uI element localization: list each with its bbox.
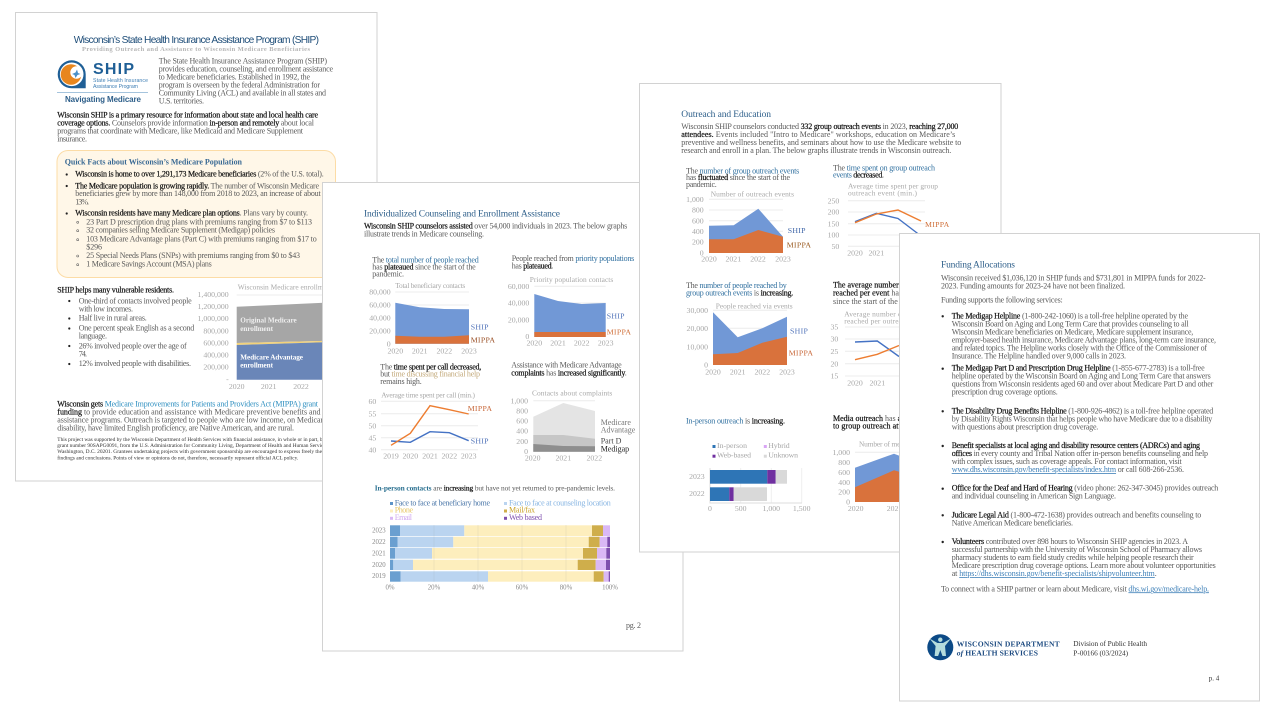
chart: Wisconsin Medicare enrollment: 2020	[229, 382, 245, 391]
text block: disclaimer: Washington, D.C. 20201. Grantees undertaking projects with government sponsorship are encouraged to express freely their	[57, 448, 326, 455]
chart: average time per call: 55	[369, 409, 376, 418]
text block: division	[1073, 639, 1147, 658]
legend: contact types: Face to face at beneficiary home	[395, 498, 490, 507]
chart: in-person outreach bars: Unknown	[768, 451, 798, 460]
chart: average time per call: The time spent per call decreased,	[380, 362, 481, 371]
chart: people reached via events: 2021	[730, 367, 746, 376]
list: disability helpline: with questions about prescription drug coverage.	[952, 422, 1098, 431]
chart: people reached via events: 2020	[705, 367, 721, 376]
chart: priority population contacts	[508, 254, 634, 348]
chart: contacts stacked bar: 20%	[428, 584, 441, 591]
chart: people reached via events	[686, 281, 813, 376]
text block: disclaimer: grant number 90SAPG0091, from the U.S. Administration for Community Living, Department of Health and Human Services,	[57, 442, 330, 449]
text block: connect: To connect with a SHIP partner or learn about Medicare, visit dhs.wi.gov/medicare-help.	[941, 584, 1209, 593]
chart: average time per call: 2023	[461, 452, 477, 461]
chart: time spent on group outreach	[828, 164, 950, 257]
text block: vulnerable residents: 74.	[79, 349, 87, 358]
chart: people reached via events: 10,000	[687, 342, 708, 351]
chart: average time per call: 2020	[403, 452, 418, 461]
chart: time spent on group outreach: 100	[828, 231, 839, 240]
list: Medigap helpline: Wisconsin Board on Aging and Long Term Care that provides counseling to all	[952, 319, 1189, 328]
chart: number of outreach events: 1,000	[686, 195, 704, 204]
chart: priority population contacts: 20,000	[508, 315, 529, 324]
panel: page 1 overview	[16, 12, 377, 481]
text block: outreach intro: research and enroll in a plan. The below graphs illustrate trends in Wisconsin outreach.	[681, 146, 951, 155]
chart: contacts stacked bar: 60%	[516, 584, 529, 591]
chart: number of outreach events: pandemic.	[686, 180, 717, 189]
icon: SHIP logo	[57, 60, 148, 104]
list: Judicare: Judicare Legal Aid (1-800-472-1638) provides outreach and benefits counseling to	[952, 510, 1201, 519]
page number: pg. 2	[626, 621, 641, 630]
list: quick facts: 13%.	[75, 197, 89, 206]
chart: contacts about complaints: 200	[516, 437, 528, 446]
list: disability helpline: The Disability Drug Benefits Helpline (1-800-926-4862) is a toll-free helpline operated	[952, 406, 1213, 415]
chart: number of outreach events: Number of outreach events	[711, 190, 794, 199]
chart: contacts about complaints: 0	[524, 447, 528, 456]
list: quick facts: 23 Part D prescription drug plans with premiums ranging from $7 to $113	[86, 217, 312, 226]
text block: vulnerable residents: 26% involved people over the age of	[79, 341, 187, 350]
chart: average time per call: but time discussing financial help	[380, 370, 480, 379]
list: Medigap helpline: Insurance. The Helpline handled over 9,000 calls in 2023.	[952, 351, 1126, 360]
chart: average number reached per event: 35	[831, 323, 838, 332]
text block: funding intro	[941, 274, 1206, 305]
text block: MIPPA: assistance programs. Outreach is targeted to people who are low income, on Medicare due to a	[57, 416, 354, 425]
chart: media outreach	[832, 414, 923, 513]
heading: counseling: Individualized Counseling and Enrollment Assistance	[364, 210, 560, 220]
chart: average time per call: 50	[369, 421, 376, 430]
list: Judicare: Native American Medicare beneficiaries.	[952, 518, 1073, 527]
chart: average number reached per event: 25	[831, 347, 838, 356]
chart: contacts about complaints: 2020	[525, 453, 541, 462]
heading: quick facts: Quick Facts about Wisconsin’s Medicare Population	[65, 157, 243, 166]
chart: total beneficiary contacts: has plateaued since the start of the	[372, 263, 476, 272]
legend: contact types	[390, 498, 611, 522]
text block: counseling intro	[364, 221, 627, 239]
chart: priority population contacts: MIPPA	[607, 328, 631, 337]
chart: time spent on group outreach: 2020	[847, 248, 863, 257]
text block: primary resource: coverage options. Counselors provide information in-person and remotely about local	[57, 119, 315, 128]
chart: in-person outreach bars: Hybrid	[768, 441, 790, 450]
chart: priority population contacts: has plateaued.	[512, 261, 553, 270]
icon: SHIP logo: Navigating Medicare	[65, 95, 142, 104]
legend: contact types: Web based	[509, 513, 542, 522]
chart: average number reached per event: 2020	[847, 378, 863, 387]
chart: average time per call: 40	[369, 445, 376, 454]
text block: outreach intro	[681, 122, 961, 155]
chart: Wisconsin Medicare enrollment: 800,000	[203, 326, 229, 335]
chart: number of outreach events: 2020	[701, 255, 717, 264]
chart: Wisconsin Medicare enrollment: Wisconsin Medicare enrollment	[238, 282, 334, 291]
chart: time spent on group outreach: 200	[828, 208, 839, 217]
chart: priority population contacts: 60,000	[508, 282, 529, 291]
list: Judicare	[942, 510, 1201, 527]
chart: media outreach: 2021	[887, 504, 902, 513]
chart: average time per call: 45	[369, 433, 376, 442]
chart: time spent on group outreach: MIPPA	[925, 220, 950, 229]
chart: contacts stacked bar: 40%	[472, 584, 485, 591]
chart: total beneficiary contacts: 20,000	[369, 327, 391, 336]
list: Medigap helpline: and related topics. The Helpline works closely with the Office of the Commissioner of	[952, 343, 1207, 352]
list: benefit specialists: with complex issues, such as coverage appeals. For contact information, visit	[952, 457, 1182, 466]
chart: Wisconsin Medicare enrollment: 1,000,000	[198, 314, 229, 323]
chart: Wisconsin Medicare enrollment: 600,000	[203, 338, 229, 347]
chart: number of outreach events: 2023	[775, 255, 791, 264]
chart: in-person outreach bars	[686, 417, 811, 513]
chart: people reached via events: 2023	[779, 367, 795, 376]
chart: people reached via events: group outreach events is increasing.	[686, 289, 793, 298]
text block: vulnerable residents: One-third of contacts involved people	[79, 296, 192, 305]
chart: total beneficiary contacts: Total beneficiary contacts	[395, 281, 465, 290]
text block: vulnerable residents: language.	[79, 332, 107, 341]
icon: SHIP logo: State Health Insurance	[93, 78, 148, 84]
chart: number of outreach events: SHIP	[788, 226, 806, 235]
legend: contact types: Phone	[395, 506, 413, 515]
chart: people reached via events: 20,000	[687, 324, 708, 333]
chart: time spent on group outreach: events decreased.	[833, 171, 884, 180]
chart: total beneficiary contacts: MIPPA	[471, 336, 495, 345]
list: quick facts: $296	[86, 242, 102, 251]
chart: priority population contacts: 2022	[574, 339, 590, 348]
chart: total beneficiary contacts: 2023	[461, 346, 477, 355]
chart: media outreach: 200	[838, 488, 850, 497]
chart: priority population contacts: Priority population contacts	[530, 275, 613, 284]
chart: in-person outreach bars: 2022	[689, 489, 705, 498]
title: Wisconsin’s State Health Insurance Assistance Program (SHIP)	[74, 35, 319, 46]
chart: average time per call: remains high.	[380, 377, 422, 386]
chart: Wisconsin Medicare enrollment: -	[226, 375, 229, 384]
chart: in-person outreach bars: 0	[708, 504, 712, 513]
chart: average number reached per event: since the start of the pandemic.	[833, 297, 933, 306]
text block: funding intro: Funding supports the following services:	[941, 296, 1063, 305]
legend: contact types: Mail/fax	[509, 506, 535, 515]
chart: average number reached per event: 20	[831, 359, 838, 368]
chart: contacts about complaints: complaints has increased significantly.	[511, 369, 627, 378]
chart: total beneficiary contacts: 60,000	[369, 301, 391, 310]
chart: time spent on group outreach: 2021	[869, 248, 884, 257]
chart: in-person outreach bars: In-person	[717, 441, 747, 450]
chart: media outreach: 400	[838, 478, 850, 487]
chart: priority population contacts: 2020	[527, 339, 542, 348]
page number: p. 4	[1209, 674, 1220, 682]
subtitle: Providing Outreach and Assistance to Wisconsin Medicare Beneficiaries	[82, 46, 310, 53]
list: Part D helpline	[942, 364, 1214, 397]
chart: in-person outreach bars: Web-based	[717, 451, 751, 460]
text block: vulnerable residents: Half live in rural areas.	[79, 314, 147, 323]
text block: funding intro: Wisconsin received $1,036,120 in SHIP funds and $731,801 in MIPPA funds for 2022-	[941, 274, 1206, 283]
list: quick facts: 1 Medicare Savings Account (MSA) plans	[86, 260, 212, 269]
list: Part D helpline: The Medigap Part D and Prescription Drug Helpline (1-855-677-2783) is a toll-free	[952, 364, 1205, 373]
text block: MIPPA: funding to provide education and assistance with Medicare preventive benefits and financial	[57, 408, 351, 417]
chart: number of outreach events: 0	[700, 248, 704, 257]
list: benefit specialists: Benefit specialists at local aging and disability resource centers (ADRCs) and aging	[952, 441, 1200, 450]
chart: people reached via events: The number of people reached by	[686, 281, 787, 290]
chart: average time per call: 2019	[383, 452, 399, 461]
text block: MIPPA: Wisconsin gets Medicare Improvements for Patients and Providers Act (MIPPA) grant	[57, 400, 319, 409]
list: quick facts: beneficiaries grew by more than 148,000 from 2018 to 2023, an increase of about	[75, 189, 321, 198]
list: benefit specialists: www.dhs.wisconsin.gov/benefit-specialists/index.htm or call 608-266-2536.	[952, 465, 1184, 474]
chart: total beneficiary contacts: The total number of people reached	[372, 255, 479, 264]
text block: disclaimer: This project was supported by the Wisconsin Department of Health Services with financial assistance, in whole or in part, by	[57, 436, 326, 443]
text block: funding intro: 2023. Funding amounts for 2023-24 have not been finalized.	[941, 282, 1125, 291]
chart: time spent on group outreach: Average time spent per group	[848, 182, 938, 191]
chart: priority population contacts: SHIP	[607, 312, 625, 321]
chart: average number reached per event: 15	[831, 372, 838, 381]
list: Part D helpline: questions from Wisconsin residents aged 60 and over about Medicare Part D and other	[952, 380, 1214, 389]
list: Part D helpline: helpline operated by the Wisconsin Board on Aging and Long Term Care that answers	[952, 372, 1211, 381]
chart: average time per call: 60	[369, 397, 376, 406]
list: disability helpline: by Disability Rights Wisconsin that helps people who have Medicare due to a disability	[952, 414, 1212, 423]
list: volunteers: pharmacy students to earn field study credits while helping people research their	[952, 553, 1194, 562]
list: quick facts: 25 Special Needs Plans (SNPs) with premiums ranging from $0 to $43	[86, 251, 300, 260]
legend: contact types: Face to face at counseling location	[509, 498, 611, 507]
text block: primary resource: Wisconsin SHIP is a primary resource for information about state and local health care	[57, 111, 318, 120]
chart: in-person outreach bars: In-person outreach is increasing.	[686, 417, 785, 426]
chart: in-person outreach bars: 500	[735, 504, 747, 513]
panel: page 4 funding	[900, 234, 1260, 701]
chart: total beneficiary contacts: pandemic.	[372, 270, 404, 279]
text block: intro: U.S. territories.	[159, 97, 204, 106]
icon: SHIP logo: SHIP	[93, 61, 134, 78]
chart: number of outreach events: 600	[692, 216, 704, 225]
text block: outreach intro: attendees. Events included "Intro to Medicare" workshops, education on Medicare’s	[681, 130, 955, 139]
chart: average number reached per event: reached per outreach	[844, 316, 910, 325]
list: Medigap helpline: employer-based health insurance, Medicare Advantage plans, long-term care insurance,	[952, 335, 1216, 344]
chart: in-person outreach bars: 1,000	[763, 504, 780, 513]
chart: media outreach: to group outreach attendees	[833, 422, 923, 431]
text block: MIPPA	[57, 400, 354, 433]
chart: average time per call: Average time spent per call (min.)	[381, 390, 476, 399]
chart: contacts about complaints: 800	[516, 406, 528, 415]
chart: average number reached per event: Average number of	[844, 309, 905, 318]
chart: average time per call: 2021	[422, 452, 438, 461]
chart: media outreach: Number of media	[859, 440, 910, 449]
list: Part D helpline: prescription drug coverage options.	[952, 388, 1058, 397]
text block: vulnerable residents: SHIP helps many vulnerable residents.	[57, 285, 174, 294]
list: benefit specialists: offices in every county and Tribal Nation offer in-person benefits counseling and help	[952, 449, 1208, 458]
icon: DHS logo	[927, 634, 953, 660]
chart: total beneficiary contacts: SHIP	[471, 322, 489, 331]
chart: average time per call: 2022	[442, 452, 457, 461]
chart: Wisconsin Medicare enrollment: 1,400,000	[198, 290, 229, 299]
text block: counseling intro: Wisconsin SHIP counselors assisted over 54,000 individuals in 2023. The below graphs	[364, 221, 627, 230]
text block: primary resource: programs that coordinate with Medicare, like Medicaid and Medicare Supplement	[57, 127, 304, 136]
text block: DHS name: WISCONSIN DEPARTMENT	[957, 640, 1060, 649]
chart: time spent on group outreach: The time spent on group outreach	[833, 164, 935, 173]
text block: intro: The State Health Insurance Assistance Program (SHIP)	[159, 57, 327, 66]
text block: MIPPA: disability, have limited English proficiency, are Native American, and are rural.	[57, 424, 294, 433]
text block: counseling intro: illustrate trends in Medicare counseling.	[364, 230, 484, 239]
list: quick facts: 32 companies selling Medicare Supplement (Medigap) policies	[86, 226, 275, 235]
chart: total beneficiary contacts: 2022	[437, 346, 452, 355]
chart: Wisconsin Medicare enrollment: 2021	[261, 382, 277, 391]
list: deaf and hard of hearing office	[942, 484, 1218, 501]
text block: disclaimer	[57, 436, 330, 462]
chart: contacts stacked bar: 80%	[560, 584, 573, 591]
panel: quick facts	[57, 150, 336, 278]
chart: priority population contacts: 0	[525, 332, 529, 341]
chart: people reached via events: 30,000	[687, 306, 708, 315]
chart: Wisconsin Medicare enrollment: 2022	[293, 382, 309, 391]
chart: Wisconsin Medicare enrollment: 200,000	[203, 363, 229, 372]
text block: intro: program is overseen by the federal Administration for	[159, 81, 320, 90]
chart: average time per call: SHIP	[471, 436, 489, 445]
chart: people reached via events: 0	[704, 361, 708, 370]
text block: vulnerable residents	[57, 285, 194, 368]
chart: contacts stacked bar	[372, 525, 618, 591]
chart: average number reached per event: 30	[831, 335, 838, 344]
text block: vulnerable residents: 12% involved people with disabilities.	[79, 359, 191, 368]
chart: contacts about complaints: Part D	[601, 436, 622, 445]
chart: media outreach: 0	[846, 498, 850, 507]
text block: primary resource	[57, 111, 318, 144]
list: quick facts: Wisconsin is home to over 1,291,173 Medicare beneficiaries (2% of the U.S. total).	[75, 170, 324, 179]
chart: number of outreach events: 400	[692, 227, 704, 236]
text block: in-person contacts caption: In-person contacts are increasing but have not yet returned to pre-pandemic levels.	[375, 484, 615, 493]
chart: contacts stacked bar: 0%	[385, 584, 395, 591]
text block: vulnerable residents: One percent speak English as a second	[79, 324, 194, 333]
list: quick facts	[66, 170, 324, 269]
chart: number of outreach events	[686, 166, 811, 264]
chart: priority population contacts: 40,000	[508, 299, 529, 308]
chart: media outreach: 2020	[848, 504, 864, 513]
text block: outreach intro: Wisconsin SHIP counselors conducted 332 group outreach events in 2023, reaching 27,000	[681, 122, 958, 131]
chart: Wisconsin Medicare enrollment	[198, 282, 345, 391]
chart: contacts about complaints: Contacts about complaints	[532, 388, 612, 397]
chart: time spent on group outreach: 50	[832, 242, 839, 251]
chart: time spent on group outreach: 150	[828, 219, 839, 228]
chart: contacts about complaints: 600	[516, 417, 528, 426]
chart: contacts stacked bar: 2019	[372, 573, 386, 580]
chart: Wisconsin Medicare enrollment: enrollment	[240, 362, 274, 370]
chart: contacts about complaints: 2021	[556, 453, 571, 462]
list: Medigap helpline: The Medigap Helpline (1-800-242-1060) is a toll-free helpline operated by the	[952, 311, 1188, 320]
chart: contacts about complaints: 400	[516, 427, 528, 436]
chart: total beneficiary contacts: 2021	[412, 346, 428, 355]
chart: people reached via events: 2022	[755, 367, 770, 376]
list: volunteers	[942, 537, 1216, 578]
chart: contacts about complaints: Medicare	[601, 418, 631, 427]
chart: contacts about complaints	[510, 361, 636, 462]
chart: number of outreach events: 200	[692, 238, 704, 247]
text block: DHS name: of HEALTH SERVICES	[957, 649, 1038, 658]
chart: total beneficiary contacts: 80,000	[369, 288, 391, 297]
list: quick facts: 103 Medicare Advantage plans (Part C) with premiums ranging from $17 to	[86, 235, 317, 244]
panel: page 3 outreach	[640, 84, 1001, 552]
text block: intro	[159, 57, 333, 106]
chart: in-person outreach bars: 1,500	[793, 504, 811, 513]
chart: Wisconsin Medicare enrollment: Medicare Advantage	[240, 353, 303, 361]
chart: priority population contacts: 2021	[550, 339, 566, 348]
chart: number of outreach events: The number of group outreach events	[686, 166, 799, 175]
chart: number of outreach events: MIPPA	[787, 240, 811, 249]
text block: division: Division of Public Health	[1073, 639, 1147, 648]
chart: total beneficiary contacts: 2020	[388, 346, 403, 355]
panel: page 2 counseling	[322, 182, 683, 651]
list: quick facts: Wisconsin residents have many Medicare plan options. Plans vary by county.	[75, 209, 308, 218]
chart: contacts stacked bar: 2021	[372, 550, 386, 558]
text block: outreach intro: preventive and wellness benefits, and seminars about how to use the Medicare website to	[681, 138, 961, 147]
icon: SHIP logo: Assistance Program	[93, 84, 138, 90]
chart: contacts about complaints: Assistance with Medicare Advantage	[511, 361, 622, 370]
list: volunteers: successful partnership with the University of Wisconsin School of Pharmacy allows	[952, 545, 1202, 554]
chart: priority population contacts: 2023	[598, 339, 614, 348]
chart: media outreach: Media outreach has as	[833, 414, 904, 423]
text block: division: P-00166 (03/2024)	[1073, 649, 1129, 658]
text block: intro: Community Living (ACL) and available in all states and	[159, 89, 326, 98]
chart: priority population contacts: People reached from priority populations	[512, 254, 634, 263]
list: quick facts: The Medicare population is growing rapidly. The number of Wisconsin Medicare	[75, 181, 319, 190]
chart: average time per call	[369, 362, 492, 461]
chart: media outreach: 800	[838, 458, 850, 467]
chart: contacts stacked bar: 2022	[372, 539, 386, 546]
chart: average number reached per event	[831, 281, 933, 387]
text block: DHS name	[957, 640, 1060, 658]
chart: total beneficiary contacts	[369, 255, 495, 355]
list: disability helpline	[942, 406, 1213, 431]
chart: total beneficiary contacts: 0	[387, 339, 391, 348]
chart: time spent on group outreach: outreach event (min.)	[848, 189, 918, 198]
chart: media outreach: 600	[838, 468, 850, 477]
list: volunteers: at https://dhs.wisconsin.gov/benefit-specialists/shipvolunteer.htm.	[952, 569, 1157, 578]
heading: funding: Funding Allocations	[941, 261, 1015, 271]
chart: average number reached per event: reached per event has	[833, 288, 902, 297]
chart: contacts about complaints: Medigap	[601, 445, 629, 454]
chart: total beneficiary contacts: 40,000	[369, 314, 391, 323]
list: benefit specialists	[942, 441, 1208, 474]
text block: intro: provides education, counseling, and enrollment assistance	[159, 65, 333, 74]
chart: media outreach: 1,000	[832, 448, 850, 457]
text block: disclaimer: findings and conclusions. Points of view or opinions do not, therefore, necessarily represent official ACL policy.	[57, 455, 298, 462]
chart: average number reached per event: 2021	[870, 378, 885, 387]
chart: in-person outreach bars: 2023	[689, 472, 705, 481]
chart: Wisconsin Medicare enrollment: enrollment	[240, 325, 274, 333]
chart: people reached via events: MIPPA	[789, 348, 813, 357]
chart: average time per call: MIPPA	[468, 404, 492, 413]
chart: Wisconsin Medicare enrollment: 1,200,000	[198, 302, 229, 311]
list: deaf and hard of hearing office: and individual counseling in American Sign Language.	[952, 492, 1116, 501]
chart: contacts about complaints: 2022	[587, 453, 602, 462]
chart: number of outreach events: 2021	[726, 255, 741, 264]
chart: average number reached per event: The average number of	[833, 281, 908, 290]
chart: number of outreach events: 800	[692, 206, 704, 215]
chart: people reached via events: SHIP	[790, 326, 808, 335]
chart: contacts stacked bar: 2020	[372, 562, 386, 569]
list: volunteers: Volunteers contributed over 898 hours to Wisconsin SHIP agencies in 2023. A	[952, 537, 1188, 546]
chart: contacts stacked bar: 100%	[602, 584, 618, 591]
heading: outreach: Outreach and Education	[681, 110, 771, 120]
text block: intro: to Medicare beneficiaries. Established in 1992, the	[159, 73, 310, 82]
chart: contacts about complaints: 1,000	[510, 396, 528, 405]
chart: contacts about complaints: Advantage	[601, 425, 636, 434]
list: deaf and hard of hearing office: Office for the Deaf and Hard of Hearing (video phone: 262-347-3045) provides outreach	[952, 484, 1218, 493]
chart: people reached via events: People reached via events	[716, 302, 793, 311]
text block: vulnerable residents: with low incomes.	[79, 304, 133, 313]
text block: primary resource: insurance.	[57, 135, 87, 144]
chart: Wisconsin Medicare enrollment: 400,000	[203, 350, 229, 360]
list: Medigap helpline	[942, 311, 1216, 360]
chart: contacts stacked bar: 2023	[372, 528, 386, 535]
chart: number of outreach events: 2022	[750, 255, 766, 264]
chart: time spent on group outreach: 250	[828, 196, 839, 205]
chart: number of outreach events: has fluctuated since the start of the	[686, 173, 790, 182]
list: Medigap helpline: Wisconsin Medicare beneficiaries on Medicare, Medicare supplement insurance,	[952, 327, 1193, 336]
chart: Wisconsin Medicare enrollment: Original Medicare	[240, 317, 297, 325]
legend: contact types: Email	[395, 513, 413, 522]
list: volunteers: Medicare prescription drug coverage options. Learn more about volunteer opportunities	[952, 561, 1216, 570]
